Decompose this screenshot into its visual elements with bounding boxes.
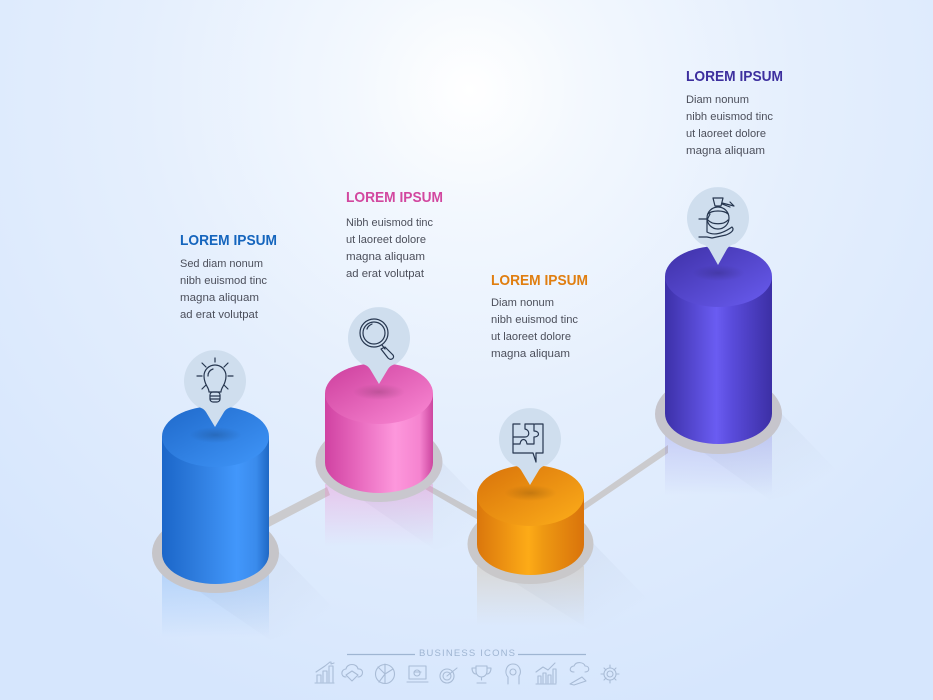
text block: orange: ut laoreet dolore bbox=[491, 331, 571, 343]
icon: lightbulb bbox=[197, 358, 233, 402]
text block: pink: ut laoreet dolore bbox=[346, 234, 426, 246]
footer: business icons bbox=[315, 648, 619, 685]
pin: magnifier bbox=[348, 307, 410, 384]
pin: money bag bbox=[687, 187, 749, 265]
text block: purple: magna aliquam bbox=[686, 145, 765, 157]
pin: lightbulb bbox=[184, 350, 246, 427]
icon: magnifier bbox=[360, 319, 394, 359]
text block: orange: nibh euismod tinc bbox=[491, 314, 579, 326]
text block: pink bbox=[346, 189, 443, 280]
text block: purple: Diam nonum bbox=[686, 94, 749, 106]
text block: pink: LOREM IPSUM bbox=[346, 189, 443, 206]
text block: orange: Diam nonum bbox=[491, 297, 554, 309]
pin: puzzle bbox=[499, 408, 561, 485]
footer title: BUSINESS ICONS bbox=[419, 648, 515, 659]
text block: pink: magna aliquam bbox=[346, 251, 425, 263]
icon: puzzle chat bbox=[513, 424, 543, 462]
text block: blue: ad erat volutpat bbox=[180, 309, 258, 321]
connector line bbox=[265, 445, 668, 529]
footer icons row bbox=[315, 662, 619, 685]
text block: orange bbox=[491, 272, 588, 360]
text block: pink: Nibh euismod tinc bbox=[346, 217, 433, 229]
text block: purple: LOREM IPSUM bbox=[686, 68, 783, 85]
text block: blue: LOREM IPSUM bbox=[180, 232, 277, 249]
cylinder: blue bbox=[152, 406, 345, 640]
text block: blue: magna aliquam bbox=[180, 292, 259, 304]
text block: orange: LOREM IPSUM bbox=[491, 272, 588, 289]
text block: blue: Sed diam nonum bbox=[180, 258, 263, 270]
text block: purple bbox=[686, 68, 783, 157]
cylinder: pink bbox=[316, 363, 508, 550]
cylinder: purple bbox=[655, 246, 848, 500]
text block: purple: nibh euismod tinc bbox=[686, 111, 774, 123]
text block: orange: magna aliquam bbox=[491, 348, 570, 360]
icon: money bag in hand bbox=[699, 198, 734, 238]
text block: blue bbox=[180, 232, 277, 321]
text block: purple: ut laoreet dolore bbox=[686, 128, 766, 140]
text block: pink: ad erat volutpat bbox=[346, 268, 424, 280]
text block: blue: nibh euismod tinc bbox=[180, 275, 268, 287]
cylinder: orange bbox=[468, 465, 660, 630]
